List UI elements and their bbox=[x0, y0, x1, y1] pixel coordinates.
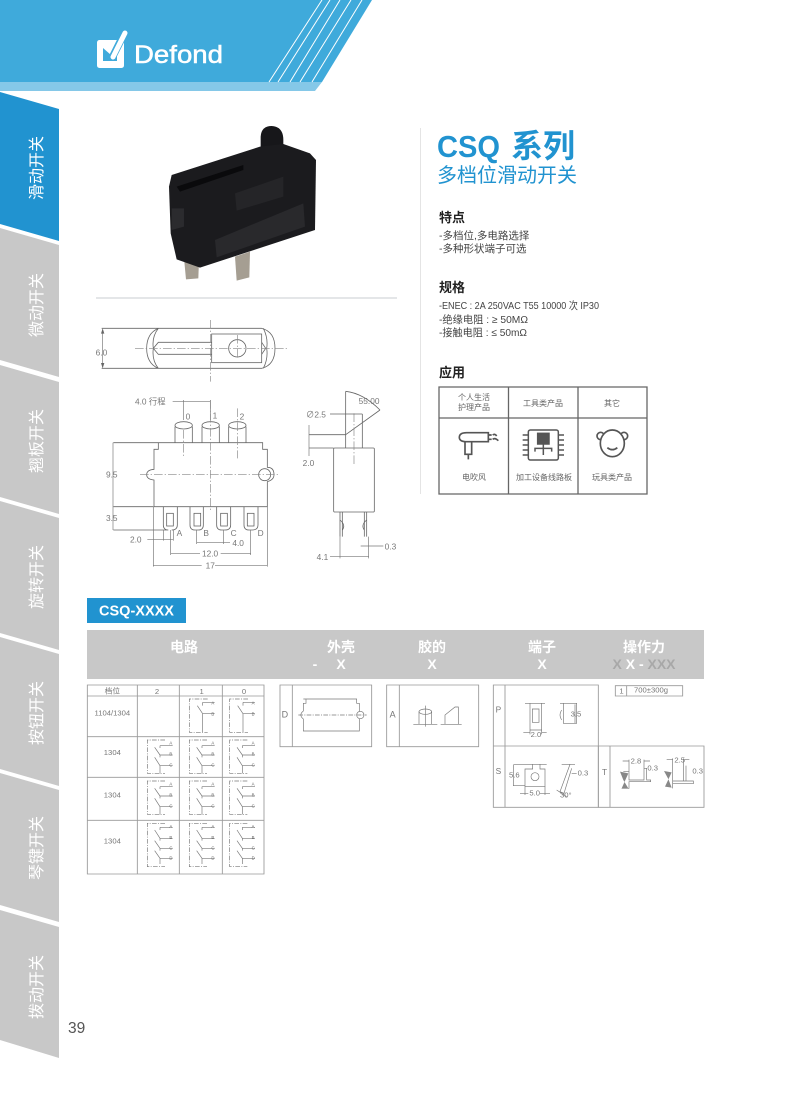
title: 多档位滑动开关 bbox=[437, 164, 577, 187]
drawing: front view bbox=[106, 397, 280, 570]
table: circuits: 0 bbox=[242, 687, 246, 696]
body bbox=[169, 144, 316, 268]
page number: 39 bbox=[68, 1020, 85, 1037]
circuit row 4: B bbox=[169, 835, 172, 840]
option: terminal P and S: 3.5 bbox=[571, 709, 581, 718]
drawing: side view: 0.3 bbox=[385, 541, 397, 551]
tab: 微动开关: 微动开关 bbox=[28, 273, 46, 337]
option: glue A: A bbox=[390, 709, 396, 719]
table: circuits: 1 bbox=[200, 687, 204, 696]
section: features: -多档位,多电路选择 bbox=[439, 229, 530, 242]
ordering code bar: X X - XXX bbox=[612, 656, 676, 672]
application table: 玩具类产品 bbox=[592, 472, 632, 482]
table: circuits: 1304 bbox=[104, 791, 122, 800]
option: terminal P and S: S bbox=[496, 766, 502, 776]
section: specifications: -ENEC : 2A 250VAC T55 10000 次 IP30 bbox=[439, 299, 599, 312]
option: terminal P and S: 0.3 bbox=[578, 769, 588, 778]
table: circuits: 2 bbox=[155, 687, 159, 696]
icon: check box bbox=[97, 32, 125, 68]
circuit row 3: A bbox=[169, 782, 172, 787]
title: 系列 bbox=[511, 128, 575, 164]
option: terminal T: 2.8 bbox=[631, 757, 641, 766]
ordering code bar: X bbox=[427, 656, 437, 672]
title: CSQ bbox=[437, 129, 500, 164]
circuit row 2: B bbox=[169, 752, 172, 757]
table: circuits: 档位 bbox=[105, 686, 120, 696]
icon: circuit chip bbox=[523, 430, 564, 460]
drawing: front view: 1 bbox=[213, 411, 218, 421]
option: force 1: 1 bbox=[619, 686, 624, 695]
ordering code bar: 电路 bbox=[170, 639, 198, 655]
drawing: front view: 3.5 bbox=[106, 513, 118, 523]
option: housing D: D bbox=[282, 709, 289, 719]
table: circuits: 1304 bbox=[104, 748, 122, 757]
application table: 工具类产品 bbox=[523, 398, 563, 408]
ordering code bar: 端子 bbox=[528, 639, 556, 655]
table: circuits: 1104/1304 bbox=[95, 709, 131, 718]
drawing: front view: B bbox=[203, 528, 209, 538]
section: features: -多种形状端子可选 bbox=[439, 242, 527, 255]
section: specifications: 规格 bbox=[439, 280, 465, 295]
option: force 1: 700±300g bbox=[634, 686, 668, 695]
tab: 按钮开关: 按钮开关 bbox=[28, 681, 46, 745]
circuit row 1 bbox=[189, 699, 255, 732]
divider bbox=[96, 298, 397, 299]
option: terminal T: 2.5 bbox=[674, 755, 685, 764]
section: specifications bbox=[439, 280, 599, 339]
ordering code bar: X bbox=[336, 656, 346, 672]
logo: Defond bbox=[97, 32, 223, 69]
option: terminal P and S: 5.6 bbox=[509, 771, 520, 780]
table: circuits bbox=[87, 685, 264, 874]
circuit row 3: B bbox=[169, 793, 172, 798]
section: specifications: -绝缘电阻 : ≥ 50MΩ bbox=[439, 313, 528, 326]
tab: 琴键开关 bbox=[0, 773, 59, 922]
circuit row 2: C bbox=[169, 762, 172, 767]
application table: 护理产品 bbox=[458, 402, 490, 412]
circuit row 4: D bbox=[252, 855, 255, 860]
option: terminal P and S: P bbox=[496, 705, 502, 715]
option: terminal T: T bbox=[602, 767, 607, 777]
option: terminal T: 0.3 bbox=[647, 764, 658, 773]
option: terminal P and S: 2.0 bbox=[531, 730, 541, 739]
section: features bbox=[439, 210, 530, 255]
circuit row 3: B bbox=[211, 793, 214, 798]
circuit row 4 bbox=[147, 823, 255, 867]
circuit row 4: D bbox=[169, 855, 172, 860]
option: force 1 bbox=[615, 686, 683, 696]
option: housing D bbox=[280, 685, 372, 747]
option: terminal T bbox=[598, 746, 704, 807]
drawing: top view: 6.0 bbox=[96, 347, 108, 357]
drawing: front view: 17 bbox=[206, 560, 215, 570]
section: features: 特点 bbox=[439, 210, 465, 225]
circuit and option tables bbox=[87, 685, 479, 874]
circuit row 2: B bbox=[211, 752, 214, 757]
circuit row 1: B bbox=[211, 712, 214, 717]
drawing: front view: 12.0 bbox=[202, 548, 219, 558]
circuit row 4: C bbox=[252, 845, 255, 850]
tab: 拨动开关 bbox=[0, 910, 59, 1058]
drawing: front view: 4.0 bbox=[232, 538, 244, 548]
circuit row 4: C bbox=[211, 845, 214, 850]
application table bbox=[439, 387, 647, 494]
circuit row 3 bbox=[147, 781, 255, 814]
circuit row 3: A bbox=[211, 782, 214, 787]
tab: 滑动开关: 滑动开关 bbox=[28, 136, 46, 200]
circuit row 4: B bbox=[211, 835, 214, 840]
logo wordmark: Defond bbox=[134, 41, 223, 69]
application table: 加工设备线路板 bbox=[516, 472, 572, 482]
application table: 个人生活 bbox=[458, 392, 490, 402]
tab: 按钮开关 bbox=[0, 637, 59, 786]
option: terminal T: 0.3 bbox=[692, 766, 703, 775]
ordering code bar: X bbox=[537, 656, 547, 672]
option: terminal P and S bbox=[493, 685, 598, 807]
drawing: side view: 2.0 bbox=[303, 458, 315, 468]
drawing: side view: 4.1 bbox=[317, 552, 329, 562]
circuit row 2 bbox=[147, 740, 255, 773]
circuit row 1: B bbox=[252, 712, 255, 717]
circuit row 1: A bbox=[211, 700, 214, 705]
drawing: front view: 9.5 bbox=[106, 470, 118, 480]
tab: 琴键开关: 琴键开关 bbox=[28, 816, 46, 880]
lever bbox=[261, 126, 283, 157]
tab: 拨动开关: 拨动开关 bbox=[28, 955, 46, 1019]
drawing: front view: 2.0 bbox=[130, 534, 142, 544]
circuit row 1: A bbox=[252, 700, 255, 705]
product photo bbox=[169, 126, 316, 281]
circuit row 4: A bbox=[211, 824, 214, 829]
circuit row 2: A bbox=[169, 741, 172, 746]
ordering code bar: 外壳 bbox=[327, 639, 355, 655]
application table: 电吹风 bbox=[462, 472, 486, 482]
tab: 微动开关 bbox=[0, 228, 59, 377]
technical drawings bbox=[96, 320, 397, 570]
ordering code bar bbox=[87, 630, 704, 679]
icon: hair dryer bbox=[459, 433, 498, 459]
circuit row 4: D bbox=[211, 855, 214, 860]
circuit row 3: B bbox=[252, 793, 255, 798]
drawing: side view: 55.00 bbox=[359, 396, 380, 406]
circuit row 2: C bbox=[211, 762, 214, 767]
tab: 翘板开关 bbox=[0, 365, 59, 514]
terminal and force option tables bbox=[493, 685, 704, 807]
circuit row 2: B bbox=[252, 752, 255, 757]
circuit row 4: A bbox=[252, 824, 255, 829]
circuit row 3: C bbox=[211, 803, 214, 808]
tab: 旋转开关 bbox=[0, 501, 59, 650]
ordering code bar: - bbox=[313, 656, 318, 672]
side tabs bbox=[0, 92, 59, 1058]
drawing: top view bbox=[96, 320, 288, 382]
application table: 其它 bbox=[604, 398, 620, 408]
ordering code bar: 胶的 bbox=[418, 639, 446, 655]
circuit row 3: C bbox=[169, 803, 172, 808]
drawing: front view: C bbox=[231, 528, 237, 538]
circuit row 2: A bbox=[252, 741, 255, 746]
model label: CSQ-XXXX bbox=[87, 598, 186, 623]
option: terminal P and S: 30° bbox=[560, 791, 572, 800]
circuit row 4: B bbox=[252, 835, 255, 840]
terminals bbox=[184, 260, 199, 279]
drawing: front view: D bbox=[258, 528, 264, 538]
ordering code bar: 操作力 bbox=[623, 639, 665, 655]
drawing: front view: 2 bbox=[240, 411, 245, 421]
section: specifications: -接触电阻 : ≤ 50mΩ bbox=[439, 326, 527, 339]
circuit row 2: C bbox=[252, 762, 255, 767]
drawing: front view: A bbox=[177, 528, 183, 538]
icon: bear bbox=[597, 430, 628, 457]
circuit row 3: C bbox=[252, 803, 255, 808]
section: applications bbox=[439, 365, 647, 494]
drawing: side view bbox=[303, 391, 397, 562]
option: glue A bbox=[387, 685, 479, 747]
circuit row 3: A bbox=[252, 782, 255, 787]
header banner bbox=[0, 0, 372, 91]
tab: 翘板开关: 翘板开关 bbox=[28, 409, 46, 473]
circuit row 4: A bbox=[169, 824, 172, 829]
section: applications: 应用 bbox=[439, 365, 465, 380]
title bbox=[437, 128, 577, 187]
circuit row 2: A bbox=[211, 741, 214, 746]
option: terminal P and S: 5.0 bbox=[529, 789, 540, 798]
circuit row 4: C bbox=[169, 845, 172, 850]
drawing: side view: ∅2.5 bbox=[306, 410, 326, 420]
drawing: front view: 4.0 行程 bbox=[135, 397, 166, 407]
tab: 滑动开关 bbox=[0, 92, 59, 241]
model label: CSQ-XXXX: CSQ-XXXX bbox=[99, 604, 174, 620]
drawing: front view: 0 bbox=[186, 411, 191, 421]
tab: 旋转开关: 旋转开关 bbox=[28, 545, 46, 609]
table: circuits: 1304 bbox=[104, 836, 122, 845]
